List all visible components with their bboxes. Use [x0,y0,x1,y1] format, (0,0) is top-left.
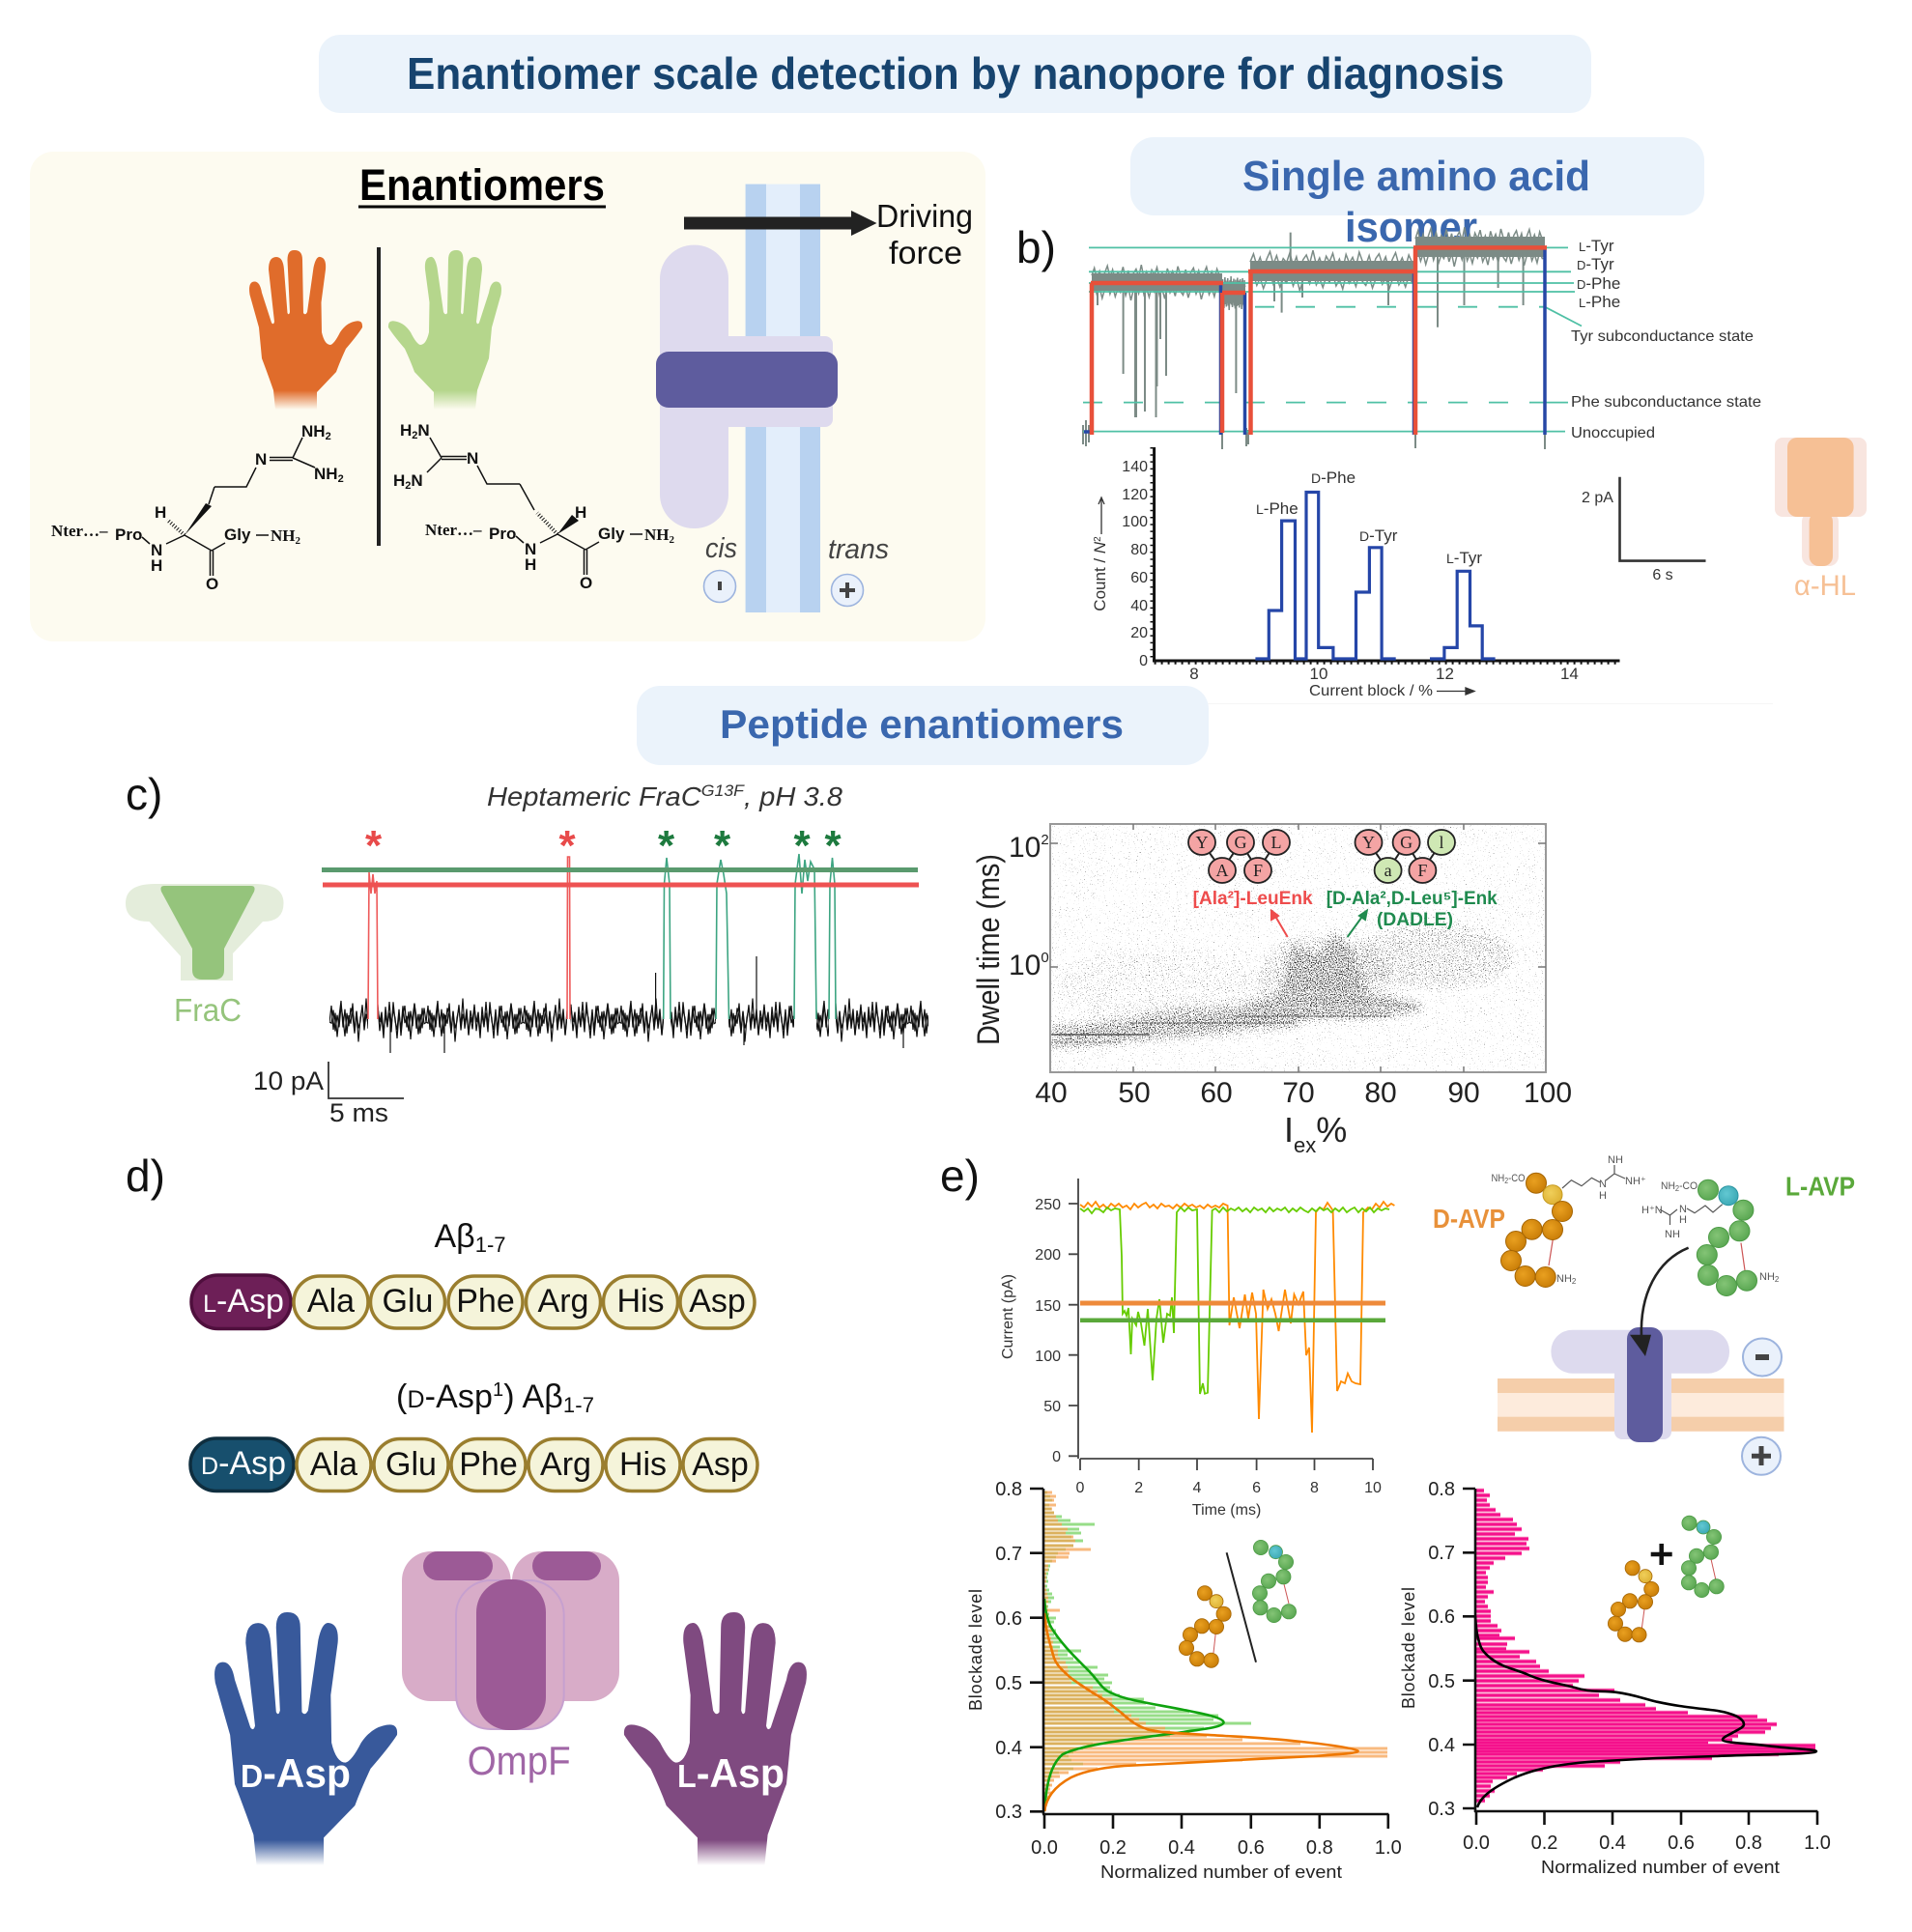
panel b: histogram [1091,447,1706,699]
separated enantiomer beads [1179,1540,1297,1667]
red blockades [368,857,570,1019]
left arginine structure: N [151,541,162,559]
right arginine structure: H [525,555,536,574]
molecule: L-AVP: N [1679,1204,1687,1215]
x tick labels: 50 [1118,1077,1151,1109]
level labels: L-Tyr [1579,237,1614,255]
scale bar: 10 pA [253,1066,324,1095]
y tick labels: 40 [1130,598,1148,614]
peptide B diagram: Y [1362,833,1375,852]
molecule: L-AVP: H [1679,1214,1687,1226]
y axis title: Dwell time (ms) [971,854,1006,1045]
x tick labels: 1.0 [1804,1833,1831,1854]
y tick labels: 0 [1052,1449,1061,1465]
label: driving force [876,198,973,270]
chart title: FraC: G13F [701,781,746,800]
x tick labels [1076,1480,1382,1496]
x tick labels [1035,1077,1572,1109]
icon: FraC pore [126,884,284,1028]
right arginine structure: 2 [669,534,674,546]
x tick labels: 40 [1035,1077,1068,1109]
y axis title: Blockade level [966,1589,985,1711]
level labels: L-Phe [1579,293,1620,311]
x tick labels: 8 [1189,665,1199,683]
y tick labels: 0.8 [995,1479,1022,1500]
sequence D-Asp: Phe [459,1446,518,1483]
peak labels: D-Phe [1311,469,1356,487]
heading: single amino acid isomer: Single amino acid [1242,153,1590,200]
horizontal quantized rows [1050,993,1401,1042]
x tick labels: 80 [1364,1077,1397,1109]
icon: blue hand D-Asp: D-Asp [241,1750,351,1796]
icon: FraC pore: FraC [174,992,242,1028]
molecule: D-AVP: NH [1608,1154,1623,1166]
x tick labels: 2 [1134,1480,1143,1496]
panel a: enantiomers [30,152,985,641]
y tick labels: 0.7 [1428,1543,1455,1564]
scale bar: 5 ms [329,1098,388,1127]
label: DADLE: [D-Ala²,D-Leu⁵]-Enk [1327,889,1498,909]
label: cis: cis [705,533,737,564]
y tick labels: 0.6 [995,1608,1022,1630]
left arginine structure: 2 [326,431,331,442]
x axis title: I [1284,1110,1294,1150]
left arginine structure: NH [301,422,326,440]
peak labels: L-Tyr [1446,549,1482,567]
x tick labels: 0 [1076,1480,1085,1496]
peptide A diagram: Y [1196,833,1208,852]
label: Abeta 1-7: 1-7 [475,1233,506,1257]
y tick labels: 0.3 [1428,1799,1455,1820]
y axis title: Count / N [1091,542,1109,611]
x tick labels [1189,665,1579,683]
x axis title: Normalized number of event [1541,1858,1780,1877]
label: Ala2-LeuEnk: [Ala²]-LeuEnk [1193,889,1313,909]
peak labels [1256,469,1482,567]
level lines [1083,247,1582,432]
label: Abeta 1-7: Aβ [435,1218,475,1255]
left arginine structure: 2 [296,535,301,547]
y tick labels [1035,1197,1061,1465]
molecule: D-AVP: -CO [1508,1173,1526,1184]
x tick labels: 0.2 [1099,1837,1127,1859]
left arginine structure: H [151,556,162,575]
plot frame [1050,824,1546,1072]
sequence L-Asp: Asp [689,1283,746,1320]
y tick labels: 100 [1035,1349,1061,1365]
scale bar [1582,477,1706,583]
right blockade histogram [1399,1479,1831,1877]
y tick labels: 80 [1130,542,1148,558]
right arginine structure: N [467,449,478,468]
y tick labels: 10 [1009,950,1041,981]
axes [1463,1489,1817,1825]
peptide A diagram: G [1235,833,1246,852]
label: D-Asp Abeta 1-7: (D-Asp [396,1378,493,1415]
molecule: D-AVP [1433,1154,1646,1287]
molecule: L-AVP: NH [1759,1271,1775,1283]
y tick labels: 0.7 [995,1544,1022,1565]
molecule: L-AVP: H⁺N [1641,1205,1663,1216]
molecule: D-AVP: NH [1556,1273,1572,1285]
nanopore schematic [1498,1327,1784,1442]
molecule: D-AVP: 2 [1504,1177,1509,1185]
icon: alpha-hemolysin pore: α-HL [1794,570,1856,602]
green blockades [664,854,836,1019]
x tick labels: 60 [1200,1077,1233,1109]
left arginine structure: O [206,575,218,593]
y tick labels: 0.5 [1428,1671,1455,1692]
sequence D-Asp: Ala [310,1446,357,1483]
sequence L-Asp: His [616,1283,665,1320]
label: trans: trans [828,534,889,565]
left arginine structure: Gly [224,526,251,544]
green asterisks: * [824,822,842,869]
green asterisks: * [793,822,811,869]
y tick labels: 0.5 [995,1673,1022,1694]
x tick labels: 10 [1364,1480,1382,1496]
panel b: current trace: Unoccupied [1571,425,1655,441]
peptide B diagram [1355,830,1455,883]
molecule: D-AVP: NH [1492,1173,1506,1184]
x tick labels: 0.8 [1306,1837,1333,1859]
x tick labels: 4 [1193,1480,1202,1496]
panel d: peptide sequences [190,1218,757,1492]
y tick labels: 120 [1122,487,1148,503]
red fit levels [1091,247,1547,435]
panel b: current trace: Tyr subconductance state [1571,328,1754,345]
molecule: D-AVP: H [1599,1190,1607,1202]
label: c: c) [126,769,162,819]
heading: peptide enantiomers: Peptide enantiomers [720,701,1124,747]
x tick labels: 10 [1310,665,1327,683]
x tick labels [1463,1833,1831,1854]
icon: plus [831,574,864,607]
heading: Enantiomers: Enantiomers [359,160,605,210]
scale bar: 2 pA [1582,490,1613,506]
x tick labels: 12 [1436,665,1454,683]
icon: minus electrode [1743,1339,1782,1376]
x tick labels [1031,1837,1402,1859]
label: DADLE [1327,889,1498,930]
green arrow [1348,911,1367,937]
y tick labels: 2 [1041,832,1049,848]
y axis title: 2 [1093,536,1103,542]
green fit [1044,1599,1224,1811]
y tick labels [1428,1479,1455,1820]
red asterisks: * [558,822,576,869]
right arginine structure: 2 [405,480,411,492]
baseline noise [329,956,928,1053]
y tick labels: 0.4 [995,1738,1022,1759]
y tick labels: 50 [1043,1399,1061,1415]
chart title: FraC: Heptameric FraC [487,781,693,811]
level labels: D-Tyr [1577,255,1614,273]
peptide A diagram: L [1271,833,1281,852]
icon: purple hand L-Asp: L-Asp [677,1750,785,1796]
red arrow [1271,911,1288,937]
x axis title: % [1316,1110,1347,1150]
blue fit verticals [1084,247,1545,435]
axes [1069,1179,1373,1470]
left arginine structure: 2 [338,473,344,485]
green bars [1044,1492,1251,1809]
sequence D-Asp: D-Asp [201,1445,286,1482]
title banner [319,35,1591,113]
icon: orange hand [249,250,362,410]
chart title: FraC: , pH 3.8 [744,781,842,811]
panel e: current vs time chart [1000,1179,1394,1519]
molecule: L-AVP: NH [1661,1180,1676,1192]
green asterisks: * [658,822,675,869]
peptide B diagram: l [1439,833,1444,852]
molecule: L-AVP: 2 [1675,1184,1680,1193]
y tick labels: 20 [1130,625,1148,641]
orange trace [1080,1202,1394,1433]
y tick labels: 200 [1035,1247,1061,1264]
icon: plus electrode [1742,1437,1781,1475]
y tick labels: 0 [1041,950,1049,966]
left arginine structure [51,422,344,593]
point cloud [1050,923,1517,1051]
heading: single amino acid isomer: isomer [1345,204,1477,251]
title banner: Enantiomer scale detection by nanopore for diagnosis [407,48,1504,99]
label: driving force: force [889,235,962,270]
x tick labels: 0.6 [1668,1833,1695,1854]
label: D-Asp Abeta 1-7: 1-7 [563,1393,594,1417]
sequence L-Asp [191,1275,755,1329]
x tick labels: 14 [1560,665,1579,683]
left arginine structure: NH [314,465,338,483]
label: D-Asp Abeta 1-7: ) Aβ [503,1378,563,1415]
molecule: L-AVP [1641,1172,1855,1296]
red asterisks: * [365,822,383,869]
right arginine structure: Pro [489,525,516,543]
sequence L-Asp: Phe [456,1283,515,1320]
y axis title [1091,497,1109,611]
peptide A diagram [1188,830,1290,883]
red level line [323,883,919,887]
x tick labels: 70 [1282,1077,1315,1109]
red asterisks [365,822,576,869]
peak labels: D-Tyr [1359,526,1398,545]
right arginine structure [393,421,674,592]
peptide B diagram: F [1417,861,1427,880]
right arginine structure: 2 [412,430,417,441]
sequence D-Asp: Arg [540,1446,591,1483]
sequence D-Asp: Glu [385,1446,437,1483]
arrow: driving force [684,211,877,236]
peptide A diagram: F [1253,861,1263,880]
membrane bilayer [746,185,820,612]
sequence D-Asp: His [619,1446,667,1483]
molecule: L-AVP: 2 [1775,1275,1780,1284]
heading: peptide enantiomers [637,686,1209,765]
right arginine structure: O [580,574,592,592]
x tick labels: 0.0 [1463,1833,1490,1854]
peptide B diagram: G [1400,833,1413,852]
right arginine structure: N [417,421,430,440]
axes [1030,1489,1388,1829]
peptide A diagram: A [1215,861,1229,880]
sequence L-Asp: L-Asp [203,1283,284,1320]
icon: purple hand L-Asp [624,1612,807,1865]
label: b: b) [1016,222,1056,272]
x axis title: Time (ms) [1192,1502,1261,1519]
y tick labels [1009,832,1049,981]
y tick labels: 150 [1035,1298,1061,1315]
x axis title: Normalized number of event [1100,1862,1342,1882]
molecule: L-AVP: -CO [1679,1180,1698,1192]
green asterisks: * [714,822,731,869]
y tick labels: 10 [1009,832,1041,864]
y tick labels [995,1479,1022,1823]
label: D-Asp Abeta 1-7: 1 [493,1379,503,1401]
curved arrow into pore [1630,1248,1689,1356]
peptide B diagram: a [1384,861,1392,880]
panel b: current trace [1083,227,1761,449]
x tick labels: 8 [1310,1480,1319,1496]
orange bars [1044,1492,1387,1809]
x tick labels: 0.8 [1735,1833,1762,1854]
sequence L-Asp: Ala [307,1283,355,1320]
x axis title: ex [1294,1133,1316,1157]
panel b: current trace: Phe subconductance state [1571,394,1761,411]
right arginine structure: H [393,471,405,490]
x tick labels: 0.4 [1168,1837,1195,1859]
sequence L-Asp: Arg [538,1283,588,1320]
y tick labels: 100 [1122,514,1148,530]
x tick labels: 6 [1252,1480,1261,1496]
icon: minus [703,570,736,603]
molecule: L-AVP: NH [1665,1229,1680,1240]
label: DADLE: (DADLE) [1377,910,1453,930]
molecule: D-AVP: N [1599,1179,1607,1190]
y tick labels: 0.3 [995,1802,1022,1823]
scatter plot: dwell time vs Iex [971,824,1572,1157]
right arginine structure: H [575,503,586,522]
y tick labels: 140 [1122,459,1148,475]
nanopore [656,245,838,528]
y tick labels [1122,459,1148,669]
molecule: D-AVP: NH⁺ [1625,1176,1646,1187]
sequence L-Asp: Glu [383,1283,433,1320]
y tick labels: 60 [1130,570,1148,586]
left arginine structure: N [255,450,267,469]
icon: green hand [388,250,501,410]
molecule: L-AVP: L-AVP [1785,1172,1855,1202]
icon: OmpF pore [402,1551,619,1783]
level labels [1577,237,1620,311]
left arginine structure: NH [271,526,296,545]
y tick labels: 0.6 [1428,1606,1455,1628]
peak labels: L-Phe [1256,499,1298,518]
heading: single amino acid isomer [1130,137,1704,251]
x tick labels: 0.4 [1599,1833,1626,1854]
green level [1080,1318,1385,1322]
black fit [1475,1616,1816,1807]
racemic mixture beads [1608,1516,1724,1642]
molecule: D-AVP: 2 [1572,1277,1577,1286]
y tick labels: 0.4 [1428,1735,1455,1756]
x tick labels: 100 [1524,1077,1572,1109]
scale bar: 6 s [1652,567,1673,583]
y axis title: Blockade level [1399,1587,1418,1709]
right arginine structure: Nter…– [425,521,482,539]
gray trace [1083,227,1545,449]
green level line [322,867,918,872]
right arginine structure: NH [644,526,669,544]
y tick labels: 0.8 [1428,1479,1455,1500]
label: e: e) [940,1151,980,1201]
y axis title: Current (pA) [1000,1274,1016,1359]
right arginine structure: Gly [598,525,625,543]
green trace [1080,1208,1389,1394]
sequence D-Asp: Asp [692,1446,749,1483]
level labels: D-Phe [1577,274,1620,293]
green asterisks [658,822,842,869]
x axis title: Current block / % [1309,683,1433,699]
x tick labels: 0.0 [1031,1837,1058,1859]
pink bars [1476,1491,1815,1801]
x tick labels: 1.0 [1375,1837,1402,1859]
orange fit [1044,1613,1358,1811]
right arginine structure: H [400,421,412,440]
y tick labels: 250 [1035,1197,1061,1213]
x tick labels: 0.6 [1238,1837,1265,1859]
y tick labels: 0 [1139,653,1148,669]
right arginine structure: N [525,540,536,558]
FraC current trace [255,831,928,1122]
left blockade histogram [966,1479,1402,1882]
scale bar [253,1062,404,1127]
axes [1152,447,1619,663]
x tick labels: 0.2 [1531,1833,1557,1854]
label: d: d) [126,1151,165,1201]
right arginine structure: N [411,471,423,490]
left arginine structure: Nter…– [51,522,108,540]
icon: alpha-hemolysin pore [1775,438,1867,602]
histogram bars [1255,493,1496,659]
left arginine structure: Pro [115,526,142,544]
label: driving force: Driving [876,198,973,234]
icon: blue hand D-Asp [214,1612,397,1865]
left arginine structure: H [155,503,166,522]
x tick labels: 90 [1447,1077,1480,1109]
molecule: D-AVP: D-AVP [1433,1204,1505,1234]
orange level [1080,1300,1385,1306]
mirror divider [377,247,381,546]
sequence D-Asp [190,1438,757,1492]
icon: OmpF pore: OmpF [468,1738,571,1783]
